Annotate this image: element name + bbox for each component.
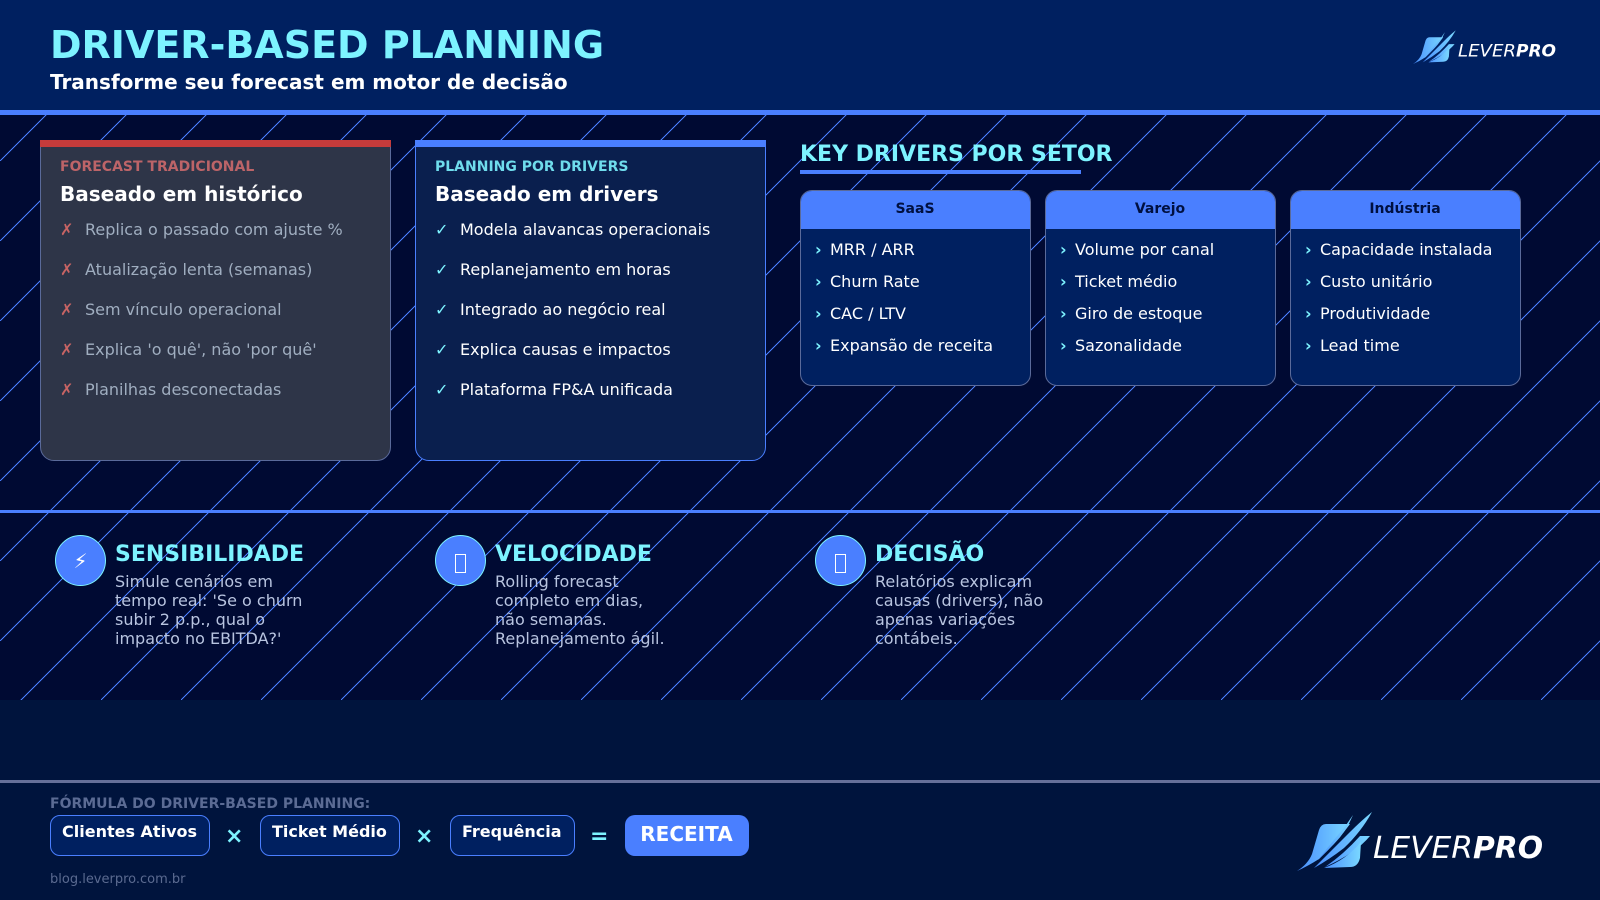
list: Varejo drivers: Giro de estoque <box>1075 304 1202 323</box>
benefit: decisão text: apenas variações <box>875 610 1015 629</box>
icon: lightning <box>55 535 106 586</box>
benefit: velocidade text: Replanejamento ágil. <box>495 629 665 648</box>
benefit: sensibilidade text: impacto no EBITDA?' <box>115 629 281 648</box>
subtitle: Transforme seu forecast em motor de decisão <box>50 70 568 94</box>
heading: key drivers: KEY DRIVERS POR SETOR <box>800 142 1113 167</box>
list: benefits: Explica causas e impactos <box>460 340 671 359</box>
formula term: frequência <box>450 815 575 856</box>
card background <box>40 140 391 461</box>
list: Indústria drivers: Produtividade <box>1320 304 1430 323</box>
list: Indústria drivers: › <box>1305 304 1312 323</box>
benefit: velocidade text: Rolling forecast <box>495 572 619 591</box>
list: SaaS drivers: › <box>815 240 822 259</box>
list: benefits: Replanejamento em horas <box>460 260 671 279</box>
section divider <box>0 510 1600 513</box>
logo: header <box>1413 30 1556 64</box>
card top bar <box>40 140 391 147</box>
benefit: sensibilidade text <box>115 572 302 648</box>
list: Varejo drivers: › <box>1060 240 1067 259</box>
list: benefits: Integrado ao negócio real <box>460 300 666 319</box>
formula term: clientes ativos <box>50 815 210 856</box>
list: Indústria drivers: Capacidade instalada <box>1320 240 1492 259</box>
column header: Indústria <box>1369 201 1441 217</box>
panel: planning por drivers <box>415 140 766 461</box>
list: Indústria drivers: › <box>1305 336 1312 355</box>
benefit: decisão title: DECISÃO <box>875 542 984 567</box>
list: Indústria drivers: › <box>1305 272 1312 291</box>
list: Varejo drivers: › <box>1060 272 1067 291</box>
icon: missing-glyph box (velocidade) <box>435 535 486 586</box>
formula label: FÓRMULA DO DRIVER-BASED PLANNING: <box>50 796 370 812</box>
card label: PLANNING POR DRIVERS <box>435 159 628 175</box>
benefit: sensibilidade title: SENSIBILIDADE <box>115 542 304 567</box>
list: SaaS drivers: CAC / LTV <box>830 304 906 323</box>
list: Indústria drivers: › <box>1305 240 1312 259</box>
list: SaaS drivers: › <box>815 272 822 291</box>
background: main dark area <box>0 0 1600 700</box>
benefit: velocidade text: não semanas. <box>495 610 607 629</box>
column header: SaaS <box>895 201 935 217</box>
list: benefits: Plataforma FP&A unificada <box>460 380 673 399</box>
benefit: decisão text: causas (drivers), não <box>875 591 1043 610</box>
card label: FORECAST TRADICIONAL <box>60 159 254 175</box>
list: benefits: ✓ <box>435 220 448 239</box>
benefit: sensibilidade text: tempo real: 'Se o churn <box>115 591 302 610</box>
icon: missing-glyph box (decisão) <box>815 535 866 586</box>
column header <box>1044 190 1276 229</box>
card background <box>415 140 766 461</box>
column header: Varejo <box>1135 201 1185 217</box>
card top bar <box>415 140 766 147</box>
list: SaaS drivers <box>815 240 993 355</box>
list: SaaS drivers: Expansão de receita <box>830 336 993 355</box>
logo: footer <box>1297 812 1543 871</box>
list: limitations <box>60 220 343 399</box>
list: benefits: ✓ <box>435 380 448 399</box>
list: limitations: Planilhas desconectadas <box>85 380 281 399</box>
list: SaaS drivers: › <box>815 336 822 355</box>
list: Varejo drivers: Sazonalidade <box>1075 336 1182 355</box>
operator: times: × <box>225 824 243 849</box>
list: limitations: ✗ <box>60 340 73 359</box>
list: Indústria drivers: Lead time <box>1320 336 1400 355</box>
benefit: velocidade text <box>495 572 665 648</box>
header band <box>0 0 1600 115</box>
list: limitations: Atualização lenta (semanas) <box>85 260 312 279</box>
benefit: velocidade title: VELOCIDADE <box>495 542 652 567</box>
footer divider <box>0 780 1600 783</box>
formula term: ticket médio: Ticket Médio <box>272 822 387 841</box>
panel: SaaS <box>800 190 1031 386</box>
benefit: velocidade text: completo em dias, <box>495 591 643 610</box>
list: benefits: ✓ <box>435 300 448 319</box>
operator: equals: = <box>590 824 608 849</box>
list: Varejo drivers: Volume por canal <box>1075 240 1214 259</box>
formula result: receita: RECEITA <box>640 822 733 846</box>
column header <box>800 190 1030 229</box>
list: limitations: Explica 'o quê', não 'por quê' <box>85 340 317 359</box>
list: benefits: ✓ <box>435 340 448 359</box>
logo: footer: LEVER <box>1373 831 1473 866</box>
formula term: ticket médio <box>260 815 400 856</box>
benefit: decisão text <box>875 572 1043 648</box>
benefit: decisão text: contábeis. <box>875 629 958 648</box>
panel: Indústria <box>1290 190 1521 386</box>
column header <box>1290 190 1520 229</box>
list: Indústria drivers <box>1305 240 1492 355</box>
list: limitations: ✗ <box>60 380 73 399</box>
list: Varejo drivers <box>1060 240 1214 355</box>
logo: footer: PRO <box>1473 831 1543 866</box>
list: SaaS drivers: MRR / ARR <box>830 240 915 259</box>
list: SaaS drivers: Churn Rate <box>830 272 920 291</box>
list: limitations: ✗ <box>60 300 73 319</box>
list: benefits: ✓ <box>435 260 448 279</box>
title: DRIVER-BASED PLANNING <box>50 23 604 67</box>
benefit: sensibilidade text: subir 2 p.p., qual o <box>115 610 265 629</box>
list: Varejo drivers: › <box>1060 336 1067 355</box>
list: Indústria drivers: Custo unitário <box>1320 272 1432 291</box>
source url: blog.leverpro.com.br <box>50 872 186 887</box>
formula term: frequência: Frequência <box>462 822 562 841</box>
operator: times: × <box>415 824 433 849</box>
logo: header: LEVER <box>1458 42 1516 62</box>
list: limitations: ✗ <box>60 220 73 239</box>
list: benefits: Modela alavancas operacionais <box>460 220 710 239</box>
logo: header: PRO <box>1516 42 1556 62</box>
card heading: Baseado em histórico <box>60 182 303 206</box>
list: limitations: ✗ <box>60 260 73 279</box>
icon: lightning: ⚡ <box>73 549 88 573</box>
panel: Varejo <box>1045 190 1276 386</box>
panel: forecast tradicional <box>40 140 391 461</box>
card heading: Baseado em drivers <box>435 182 658 206</box>
list: limitations: Replica o passado com ajuste % <box>85 220 343 239</box>
formula term: clientes ativos: Clientes Ativos <box>62 822 197 841</box>
benefit: sensibilidade text: Simule cenários em <box>115 572 273 591</box>
list: SaaS drivers: › <box>815 304 822 323</box>
background: diagonal line pattern <box>0 115 1600 700</box>
benefit: decisão text: Relatórios explicam <box>875 572 1032 591</box>
formula result: receita <box>625 815 749 856</box>
list: Varejo drivers: › <box>1060 304 1067 323</box>
list: limitations: Sem vínculo operacional <box>85 300 282 319</box>
list: Varejo drivers: Ticket médio <box>1075 272 1177 291</box>
heading underline <box>800 170 1081 174</box>
list: benefits <box>435 220 710 399</box>
